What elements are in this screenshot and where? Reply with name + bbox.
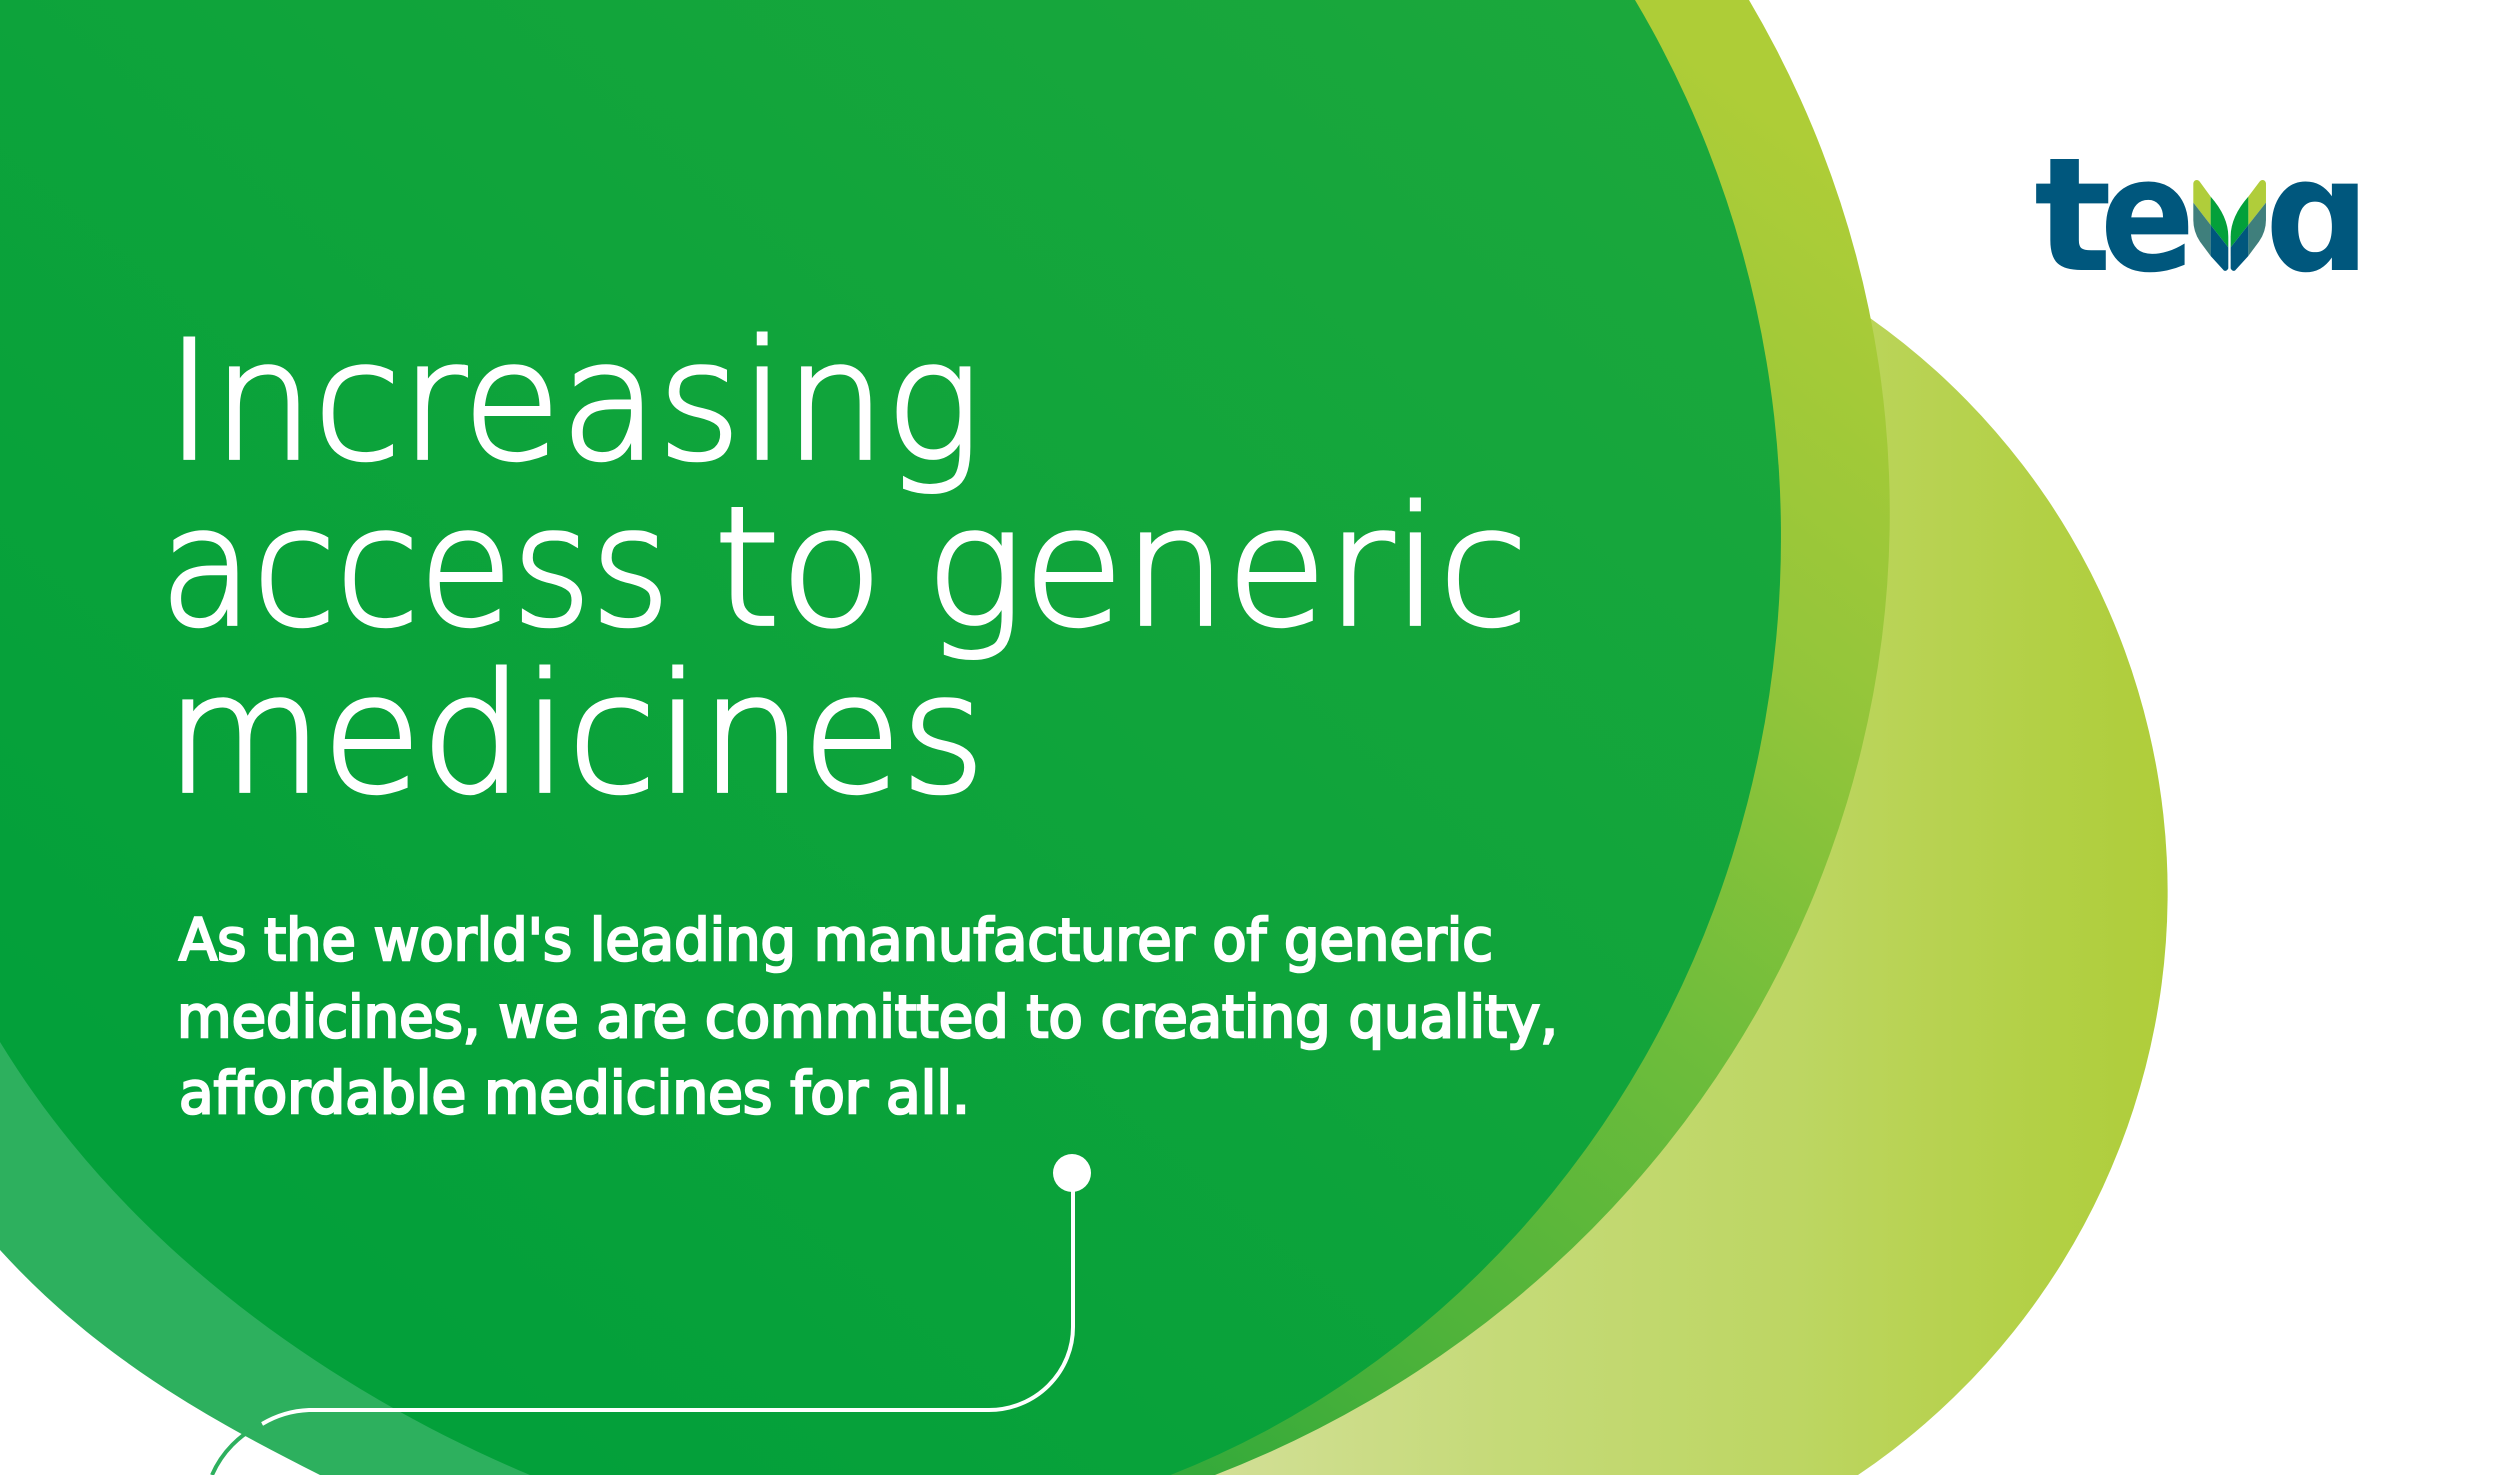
title	[160, 306, 1528, 830]
icon: teva leaves	[2193, 180, 2266, 271]
body text: medicines, we are committed to creating quality,	[177, 983, 1558, 1051]
body text: As the world's leading manufacturer of generic	[179, 906, 1493, 974]
circle: pale olive background	[1100, 318, 2168, 1475]
logo: teva	[2034, 124, 2370, 308]
circle: mid gradient band	[0, 0, 1890, 1475]
logo: teva: t	[2034, 124, 2112, 308]
logo: teva: e	[2100, 124, 2195, 308]
title: access	[160, 472, 670, 663]
connector line with dot	[212, 1154, 1091, 1475]
logo: teva: ɑ	[2265, 124, 2370, 308]
title: Increasing	[166, 306, 981, 497]
body text	[177, 906, 1558, 1127]
title: medicines	[166, 639, 985, 830]
title: generic	[926, 472, 1528, 663]
title: to	[714, 472, 883, 663]
circle: main green panel	[0, 0, 1781, 1475]
body text: affordable medicines for all.	[179, 1059, 970, 1127]
